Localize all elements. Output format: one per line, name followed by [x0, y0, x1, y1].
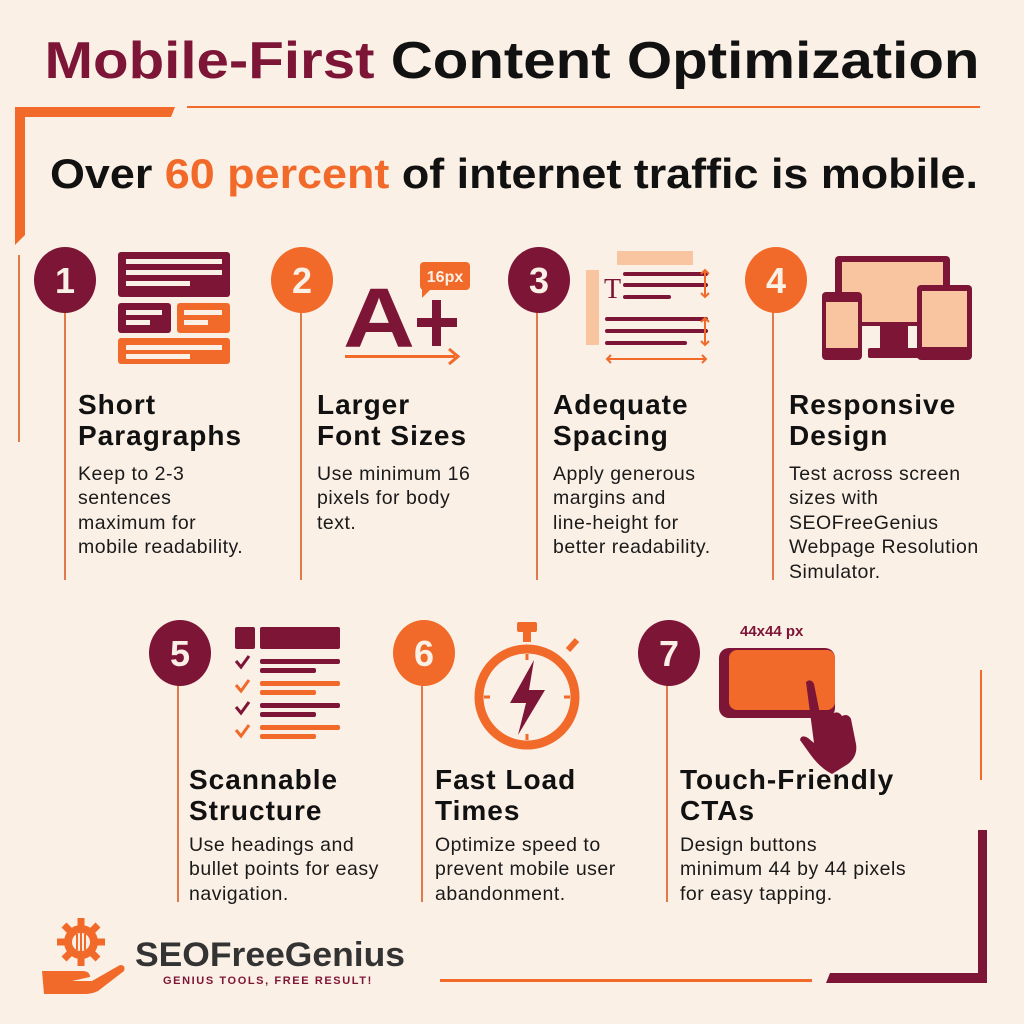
icon: touch button	[719, 623, 856, 774]
number badge 4	[745, 247, 807, 313]
item 7: Touch-Friendly CTAs: for easy tapping.	[680, 883, 833, 905]
item 2: Larger Font Sizes: pixels for body	[317, 487, 450, 509]
description: Optimize speed to	[435, 834, 601, 856]
icon: stopwatch	[479, 622, 577, 745]
item 5: Scannable Structure	[149, 620, 379, 905]
item 3: Adequate Spacing	[508, 247, 711, 580]
item 1: Short Paragraphs: sentences	[78, 487, 171, 509]
heading: Short	[78, 389, 156, 420]
number badge 7	[638, 620, 700, 686]
number badge 5	[149, 620, 211, 686]
item 6: Fast Load Times: abandonment.	[435, 883, 566, 905]
item 5: Scannable Structure: bullet points for easy	[189, 858, 379, 880]
item 7: Touch-Friendly CTAs: minimum 44 by 44 pixels	[680, 858, 906, 880]
title: Mobile-First Content Optimization	[44, 32, 980, 90]
number badge 6: 6	[414, 633, 434, 674]
heading: Touch-Friendly	[680, 764, 894, 795]
item 7: Touch-Friendly CTAs	[638, 620, 906, 905]
number badge 1: 1	[55, 260, 75, 301]
subtitle: Over 60 percent of internet traffic is mobile.	[50, 150, 978, 197]
description: Apply generous	[553, 463, 696, 485]
item 6: Fast Load Times: prevent mobile user	[435, 858, 616, 880]
decorative bracket top-left	[15, 106, 980, 245]
item 1: Short Paragraphs: mobile readability.	[78, 536, 243, 558]
description: Use headings and	[189, 834, 354, 856]
description: Design buttons	[680, 834, 817, 856]
item 5: Scannable Structure: navigation.	[189, 883, 289, 905]
item 3: Adequate Spacing: better readability.	[553, 536, 711, 558]
item 3: Adequate Spacing: Spacing	[553, 420, 669, 451]
number badge 2: 2	[292, 260, 312, 301]
item 4: Responsive Design: Webpage Resolution	[789, 536, 979, 558]
item 2: Larger Font Sizes: Font Sizes	[317, 420, 467, 451]
item 4: Responsive Design	[745, 247, 979, 583]
icon: spacing	[586, 251, 709, 363]
tagline: GENIUS TOOLS, FREE RESULT!	[163, 975, 373, 987]
icon: A+ font size: A	[343, 271, 415, 365]
icon: devices	[822, 256, 972, 360]
number badge 1	[34, 247, 96, 313]
item 2: Larger Font Sizes: text.	[317, 512, 356, 534]
decorative bracket bottom-right	[440, 670, 987, 983]
icon: A+ font size: 16px	[427, 269, 463, 286]
number badge 5: 5	[170, 633, 190, 674]
item 2: Larger Font Sizes	[271, 247, 470, 580]
description: Use minimum 16	[317, 463, 470, 485]
item 4: Responsive Design: SEOFreeGenius	[789, 512, 939, 534]
icon: touch button: 44x44 px	[740, 623, 804, 640]
item 3: Adequate Spacing: margins and	[553, 487, 666, 509]
item 6: Fast Load Times	[393, 620, 616, 905]
heading: Fast Load	[435, 764, 576, 795]
icon: paragraphs	[118, 252, 230, 364]
number badge 6	[393, 620, 455, 686]
number badge 3	[508, 247, 570, 313]
icon: A+ font size	[343, 262, 470, 365]
heading: Adequate	[553, 389, 689, 420]
heading: Scannable	[189, 764, 338, 795]
number badge 4: 4	[766, 260, 786, 301]
icon: spacing: T	[604, 274, 621, 305]
icon: checklist	[235, 627, 340, 739]
number badge 7: 7	[659, 633, 679, 674]
heading: Responsive	[789, 389, 956, 420]
icon: gear and hand	[42, 918, 124, 994]
item 1: Short Paragraphs: Paragraphs	[78, 420, 242, 451]
item 4: Responsive Design: Simulator.	[789, 561, 881, 583]
description: Keep to 2-3	[78, 463, 184, 485]
description: Test across screen	[789, 463, 961, 485]
item 4: Responsive Design: sizes with	[789, 487, 879, 509]
item 1: Short Paragraphs: maximum for	[78, 512, 196, 534]
number badge 2	[271, 247, 333, 313]
item 1: Short Paragraphs	[34, 247, 243, 580]
item 4: Responsive Design: Design	[789, 420, 888, 451]
logo	[42, 918, 405, 994]
item 7: Touch-Friendly CTAs: CTAs	[680, 795, 755, 826]
item 3: Adequate Spacing: line-height for	[553, 512, 679, 534]
item 5: Scannable Structure: Structure	[189, 795, 322, 826]
heading: Larger	[317, 389, 410, 420]
brand name: SEOFreeGenius	[135, 936, 405, 974]
item 6: Fast Load Times: Times	[435, 795, 520, 826]
number badge 3: 3	[529, 260, 549, 301]
